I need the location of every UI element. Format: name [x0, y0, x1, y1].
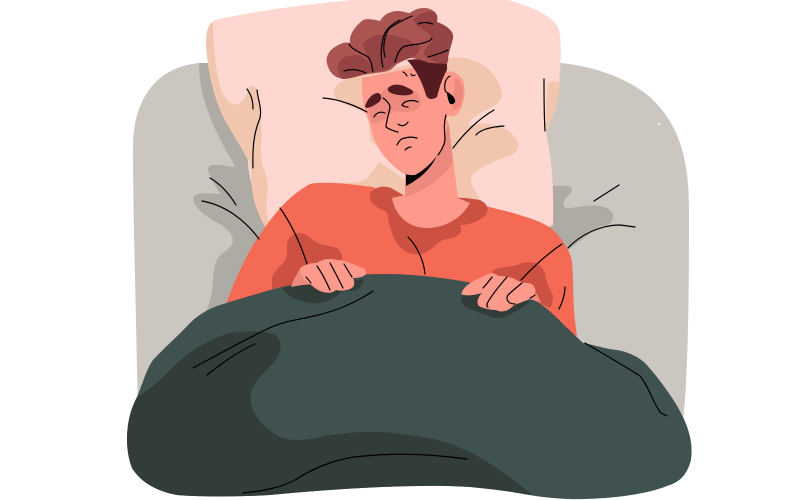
- left eyebrow: [388, 85, 413, 95]
- blanket: [127, 274, 692, 499]
- hair lines: [344, 16, 448, 73]
- inner ear: [452, 78, 463, 110]
- sweater: [226, 183, 577, 350]
- left arm shadow: [272, 233, 342, 292]
- pillow left tan fold: [206, 22, 270, 228]
- right eyebrow: [365, 93, 381, 108]
- sideburn hair: [407, 59, 447, 99]
- right arm shadow: [492, 262, 553, 308]
- eye shadow: [369, 87, 421, 123]
- face lines: [374, 72, 455, 155]
- mattress: [133, 63, 689, 420]
- wrinkle lines on bedding and sweater: [202, 79, 635, 309]
- head: [327, 8, 465, 197]
- pillow: [206, 0, 561, 280]
- neck shadow: [405, 125, 453, 197]
- pillow right tan fold: [546, 81, 560, 132]
- face: [362, 62, 447, 175]
- ear: [440, 71, 465, 116]
- left hand: [291, 259, 366, 293]
- chin shadow: [406, 153, 438, 186]
- hair: [327, 8, 453, 79]
- tan shadow behind head: [334, 57, 518, 210]
- neck: [392, 120, 470, 228]
- right hand: [462, 273, 541, 311]
- right hand shadow on blanket: [461, 290, 530, 318]
- blanket dark fold: [127, 331, 533, 496]
- left pillow shadow: [193, 63, 275, 314]
- sweater collar shadow: [370, 187, 488, 254]
- left hand shadow on blanket: [282, 279, 363, 303]
- right pillow shadow: [548, 186, 613, 250]
- blanket lines: [193, 291, 667, 493]
